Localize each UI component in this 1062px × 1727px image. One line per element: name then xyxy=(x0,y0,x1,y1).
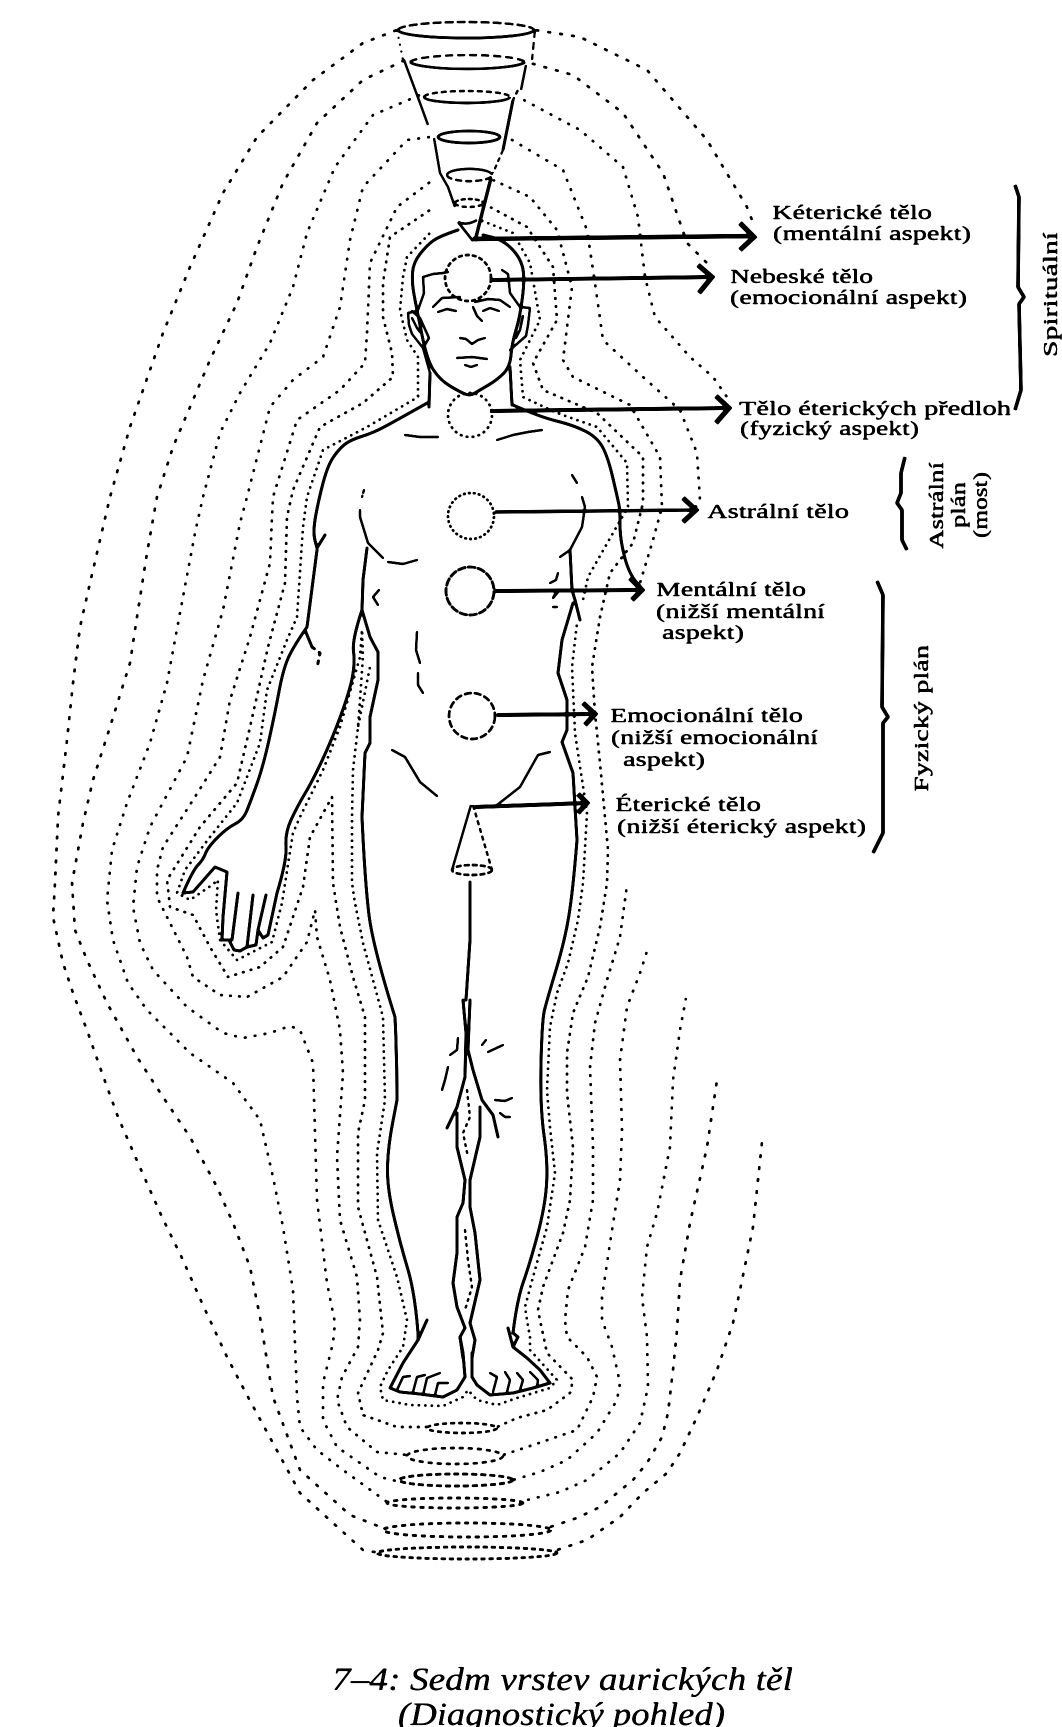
arrow: mental xyxy=(495,578,642,600)
label: emotional body: Emocionální tělo xyxy=(610,705,803,727)
aura layer 5 xyxy=(107,95,727,1508)
chakra: solar plexus xyxy=(446,567,494,615)
label: mental body: aspekt) xyxy=(662,622,744,644)
brace: physical plane xyxy=(873,581,888,853)
label: etheric template body: (fyzický aspekt) xyxy=(740,418,919,440)
aura layers xyxy=(53,30,762,1559)
aura layer 6 xyxy=(72,60,717,1537)
root chakra cone xyxy=(452,805,492,875)
label: ketheric body xyxy=(772,202,971,245)
labels xyxy=(610,202,1011,838)
vertical label: astral plane: (most) xyxy=(970,472,992,538)
label: mental body xyxy=(656,579,826,644)
crown chakra cone xyxy=(397,22,535,241)
vertical label: astral plane xyxy=(926,461,992,549)
human figure xyxy=(183,230,640,1397)
arrow: ketheric xyxy=(473,223,754,250)
label: etheric body: Éterické tělo xyxy=(615,793,761,816)
arm and hand xyxy=(183,550,362,951)
brace: astral plane xyxy=(897,457,907,550)
label: etheric body: (nižší éterický aspekt) xyxy=(617,816,866,838)
collar bones xyxy=(405,430,542,440)
torso and left leg xyxy=(362,548,465,1397)
brace: spiritual xyxy=(1015,185,1024,410)
aura layer 7: outermost xyxy=(53,30,762,1559)
label: etheric body xyxy=(615,793,866,838)
label: etheric template body: Tělo éterických předloh xyxy=(739,398,1011,420)
chakra circles xyxy=(445,255,495,739)
caption: 7–4: Sedm vrstev aurických těl xyxy=(332,1662,793,1698)
chest and pelvis details xyxy=(360,475,585,1310)
label: ketheric body: (mentální aspekt) xyxy=(773,223,971,245)
arrow: emotional xyxy=(497,703,595,725)
arrow: etheric xyxy=(475,794,587,813)
toes xyxy=(397,1372,538,1395)
vertical label: astral plane: Astrální xyxy=(926,461,948,549)
face features xyxy=(408,270,530,373)
label: astral body: Astrální tělo xyxy=(707,501,849,523)
label: celestial body: Nebeské tělo xyxy=(730,266,873,288)
label: ketheric body: Kéterické tělo xyxy=(772,202,932,224)
caption xyxy=(332,1662,793,1727)
neck and shoulders xyxy=(314,367,640,586)
chakra: brow xyxy=(445,255,491,301)
vertical label: spiritual: Spirituální xyxy=(1040,231,1062,357)
label: etheric template body xyxy=(739,398,1011,440)
vertical label: astral plane: plán xyxy=(948,482,970,528)
chakra: throat xyxy=(448,393,492,437)
label: emotional body: aspekt) xyxy=(623,749,705,771)
aura layer 1: closest to body xyxy=(177,220,628,1406)
label: emotional body: (nižší emocionální xyxy=(611,727,819,749)
label: celestial body xyxy=(730,266,967,309)
arrows xyxy=(473,223,754,813)
vertical label: physical plane: Fyzický plán xyxy=(911,645,933,792)
aura layer 2 xyxy=(167,207,643,1433)
arrow: astral xyxy=(495,498,696,522)
arrow: celestial xyxy=(492,265,712,293)
chakra: sacral xyxy=(449,693,495,739)
label: mental body: Mentální tělo xyxy=(656,579,806,601)
label: mental body: (nižší mentální xyxy=(656,601,826,623)
label: celestial body: (emocionální aspekt) xyxy=(730,287,967,309)
arrow: etheric template xyxy=(490,396,729,423)
aura layer 3 xyxy=(157,180,662,1464)
chakra: heart xyxy=(448,493,494,539)
head outline xyxy=(412,230,524,395)
inner legs xyxy=(447,882,498,1358)
aura layer 4 xyxy=(133,137,700,1486)
label: emotional body xyxy=(610,705,819,771)
right torso and leg xyxy=(472,550,580,1395)
